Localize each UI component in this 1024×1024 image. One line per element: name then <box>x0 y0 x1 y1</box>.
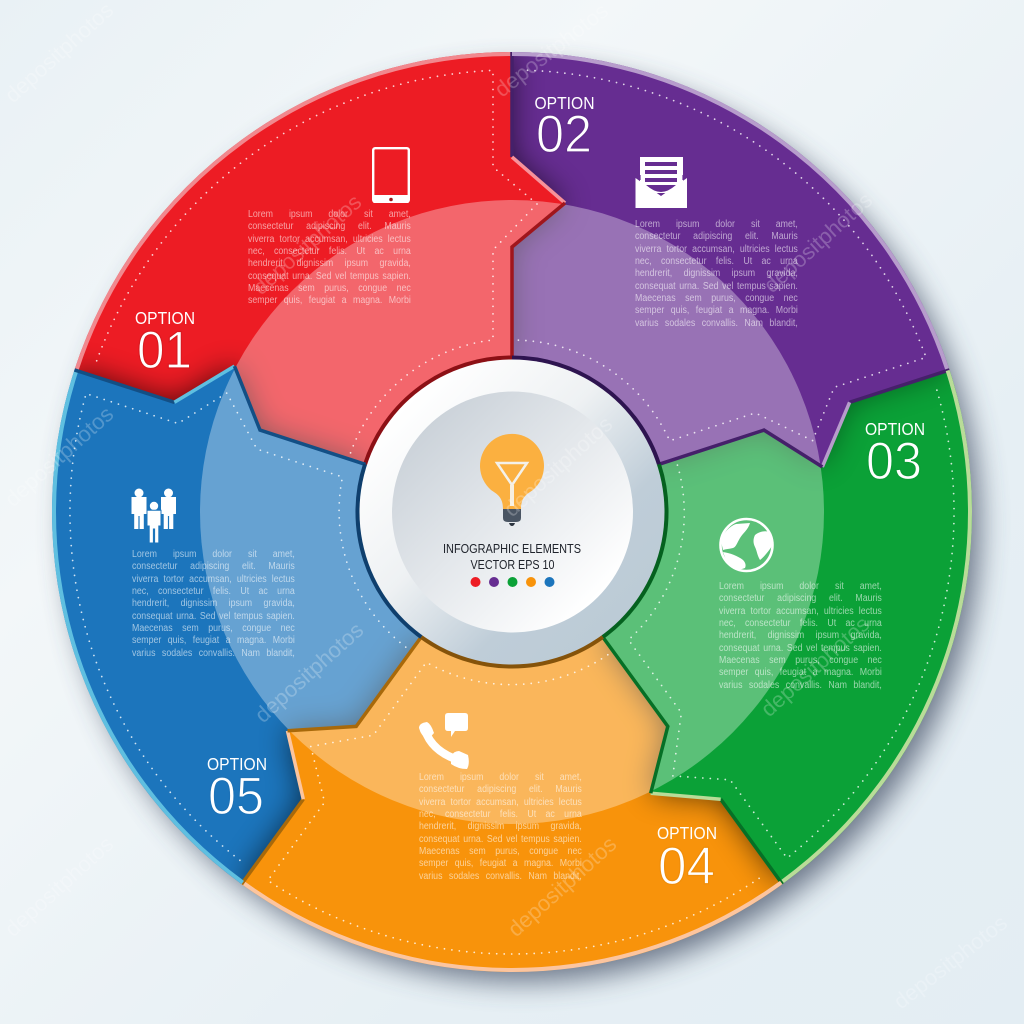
text block: option 03 description: varius sodales convallis. Nam blandit, <box>719 680 882 691</box>
text block: option 01 description: consequat urna. Sed vel tempus sapien. <box>248 271 411 282</box>
text block: option 01 description: consectetur adipiscing elit. Mauris <box>248 221 411 232</box>
stock watermark marks: depositphotos <box>0 831 118 942</box>
label: option 02: OPTION <box>534 93 594 113</box>
text block: option 04 description: varius sodales convallis. Nam blandit, <box>419 871 582 882</box>
edges: purple <box>512 54 950 467</box>
text block: option 05 description: Maecenas sem purus, congue nec <box>132 623 295 634</box>
translucent inner circle overlay <box>200 200 824 824</box>
stock watermark marks: depositphotos <box>756 611 874 722</box>
icon: envelope with letter <box>636 157 687 208</box>
hub title: VECTOR EPS 10 <box>470 558 554 572</box>
panel: option 01 red segment <box>74 52 565 464</box>
text block: option 02 description: Maecenas sem purus, congue nec <box>635 293 798 304</box>
label: option 03: 03 <box>866 432 922 491</box>
text block: option 01 description: semper quis, feugiat a magna. Morbi <box>248 295 411 306</box>
panel: option 05 blue segment <box>52 366 421 884</box>
text block: option 02 description: viverra tortor accumsan, ultricies lectus <box>635 244 798 255</box>
text block: option 03 description: Maecenas sem purus, congue nec <box>719 655 882 666</box>
label: option 01: 01 <box>137 321 192 380</box>
stock watermark marks: depositphotos <box>503 831 621 942</box>
text block: option 05 description: Lorem ipsum dolor sit amet, <box>132 549 295 560</box>
text block: option 01 description <box>248 209 411 306</box>
label: option 05: 05 <box>208 767 264 826</box>
center hub <box>360 360 664 664</box>
text block: option 02 description: nec, consectetur felis. Ut ac urna <box>635 256 798 267</box>
text block: option 02 description <box>635 219 798 329</box>
panel: option 02 purple segment <box>512 52 950 467</box>
icon: group of people <box>132 488 176 543</box>
edges: green <box>602 370 970 884</box>
text block: option 02 description: varius sodales convallis. Nam blandit, <box>635 318 798 329</box>
text block: option 04 description: hendrerit, dignissim ipsum gravida, <box>419 821 582 832</box>
drop shadow under the wheel <box>66 68 980 982</box>
text block: option 04 description: nec, consectetur felis. Ut ac urna <box>419 809 582 820</box>
dotted outlines inside the segments <box>70 70 954 954</box>
text block: option 04 description: consectetur adipiscing elit. Mauris <box>419 784 582 795</box>
edges: blue <box>54 366 422 883</box>
text block: option 01 description: hendrerit, dignissim ipsum gravida, <box>248 258 411 269</box>
text block: option 03 description <box>719 581 882 691</box>
stock watermark marks: depositphotos <box>759 187 877 298</box>
text block: option 03 description: semper quis, feugiat a magna. Morbi <box>719 667 882 678</box>
text block: option 04 description: viverra tortor accumsan, ultricies lectus <box>419 797 582 808</box>
label: option 03: OPTION <box>865 419 925 439</box>
text block: option 05 description: semper quis, feugiat a magna. Morbi <box>132 635 295 646</box>
label: option 04: OPTION <box>657 823 717 843</box>
stock watermark marks: depositphotos <box>499 411 617 522</box>
text block: option 02 description: semper quis, feugiat a magna. Morbi <box>635 305 798 316</box>
edges: red <box>76 52 565 464</box>
text block: option 03 description: consectetur adipiscing elit. Mauris <box>719 593 882 604</box>
text block: option 05 description: consequat urna. Sed vel tempus sapien. <box>132 611 295 622</box>
stock watermark marks: depositphotos <box>0 0 118 108</box>
text block: option 01 description: viverra tortor accumsan, ultricies lectus <box>248 234 411 245</box>
text block: option 05 description: nec, consectetur felis. Ut ac urna <box>132 586 295 597</box>
text block: option 03 description: nec, consectetur felis. Ut ac urna <box>719 618 882 629</box>
panel: option 04 orange segment <box>242 637 782 972</box>
text block: option 01 description: nec, consectetur felis. Ut ac urna <box>248 246 411 257</box>
text block: option 05 description: viverra tortor accumsan, ultricies lectus <box>132 574 295 585</box>
text block: option 05 description: hendrerit, dignissim ipsum gravida, <box>132 598 295 609</box>
text block: option 02 description: consectetur adipiscing elit. Mauris <box>635 231 798 242</box>
text block: option 02 description: consequat urna. Sed vel tempus sapien. <box>635 281 798 292</box>
text block: option 04 description <box>419 772 582 882</box>
stock watermark marks: depositphotos <box>889 910 1012 1014</box>
text block: option 04 description: Maecenas sem purus, congue nec <box>419 846 582 857</box>
stock watermark marks: depositphotos <box>490 0 613 102</box>
panel: option 03 green segment <box>602 370 972 884</box>
text block: option 02 description: Lorem ipsum dolor sit amet, <box>635 219 798 230</box>
text block: option 04 description: semper quis, feugiat a magna. Morbi <box>419 858 582 869</box>
label: option 05: OPTION <box>207 754 267 774</box>
icon: tablet <box>373 148 409 203</box>
text block: option 02 description: hendrerit, dignissim ipsum gravida, <box>635 268 798 279</box>
hub title <box>443 542 581 572</box>
label: option 04: 04 <box>658 837 715 896</box>
stock watermark marks: depositphotos <box>248 189 366 300</box>
text block: option 04 description: consequat urna. Sed vel tempus sapien. <box>419 834 582 845</box>
text block: option 05 description: varius sodales convallis. Nam blandit, <box>132 648 295 659</box>
hub title: INFOGRAPHIC ELEMENTS <box>443 542 581 556</box>
text block: option 04 description: Lorem ipsum dolor sit amet, <box>419 772 582 783</box>
icon: globe <box>720 519 772 571</box>
text block: option 05 description <box>132 549 295 659</box>
stock watermark marks: depositphotos <box>0 401 118 512</box>
label: option 01: OPTION <box>135 308 195 328</box>
text block: option 05 description: consectetur adipiscing elit. Mauris <box>132 561 295 572</box>
text block: option 03 description: Lorem ipsum dolor sit amet, <box>719 581 882 592</box>
text block: option 03 description: viverra tortor accumsan, ultricies lectus <box>719 606 882 617</box>
edges: orange <box>242 637 781 970</box>
legend dots <box>470 577 554 587</box>
stock watermark marks: depositphotos <box>250 617 368 728</box>
text block: option 03 description: hendrerit, dignissim ipsum gravida, <box>719 630 882 641</box>
text block: option 01 description: Lorem ipsum dolor sit amet, <box>248 209 411 220</box>
icon: light bulb <box>480 434 544 526</box>
text block: option 03 description: consequat urna. Sed vel tempus sapien. <box>719 643 882 654</box>
label: option 02: 02 <box>536 105 592 164</box>
text block: option 01 description: Maecenas sem purus, congue nec <box>248 283 411 294</box>
icon: phone with speech bubble <box>419 713 469 769</box>
